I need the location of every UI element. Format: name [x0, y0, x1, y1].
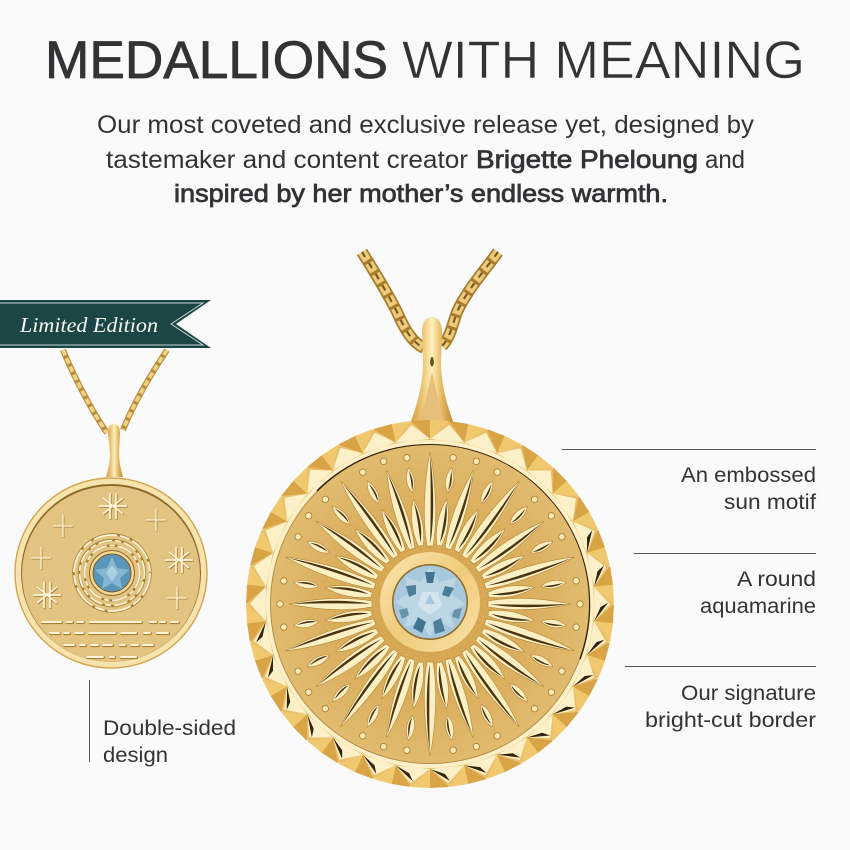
intro text block — [97, 111, 755, 208]
title: MEDALLIONS — [45, 31, 388, 90]
intro text block: inspired by her mother’s endless warmth. — [174, 180, 668, 208]
title — [45, 31, 805, 90]
callout: double-sided design — [90, 680, 236, 767]
large medallion necklace: sun motif — [179, 252, 660, 850]
callout: double-sided design: Double-sided — [103, 717, 236, 740]
textured disc — [271, 445, 589, 763]
intro text block: and — [705, 146, 745, 174]
icon: large necklace chain — [362, 252, 498, 348]
aquamarine gem in bezel — [380, 552, 480, 652]
callout: round aquamarine: A round — [737, 568, 816, 591]
callout: double-sided design: design — [103, 744, 168, 767]
small medallion necklace: double-sided reverse — [15, 350, 207, 668]
icon: large medallion — [179, 379, 660, 850]
callout: bright-cut border — [625, 666, 816, 732]
callout: bright-cut border: Our signature — [681, 682, 816, 705]
callout: round aquamarine — [634, 554, 816, 618]
callout: embossed sun motif: An embossed — [681, 464, 816, 487]
title: WITH MEANING — [402, 31, 805, 90]
intro text block: tastemaker and content creator — [106, 146, 468, 174]
icon: small medallion disc — [15, 478, 207, 668]
icon: constellation stars — [31, 493, 194, 610]
callout: bright-cut border: bright-cut border — [645, 709, 816, 732]
icon: large bail — [410, 317, 454, 424]
icon: small necklace chain — [63, 350, 167, 433]
icon: morse lines — [42, 622, 178, 658]
intro text block: Our most coveted and exclusive release yet, designed by — [97, 111, 755, 139]
callout: round aquamarine: aquamarine — [700, 595, 816, 618]
bright-cut border — [179, 379, 660, 850]
ribbon text: Limited Edition — [19, 313, 158, 337]
intro text block: Brigette Pheloung — [476, 146, 698, 174]
callout: embossed sun motif — [562, 450, 816, 514]
icon: small bail — [106, 424, 123, 477]
limited edition ribbon — [0, 300, 211, 348]
callout: embossed sun motif: sun motif — [724, 491, 816, 514]
sun rays — [263, 438, 597, 770]
icon: morse rings and aquamarine — [74, 534, 150, 612]
